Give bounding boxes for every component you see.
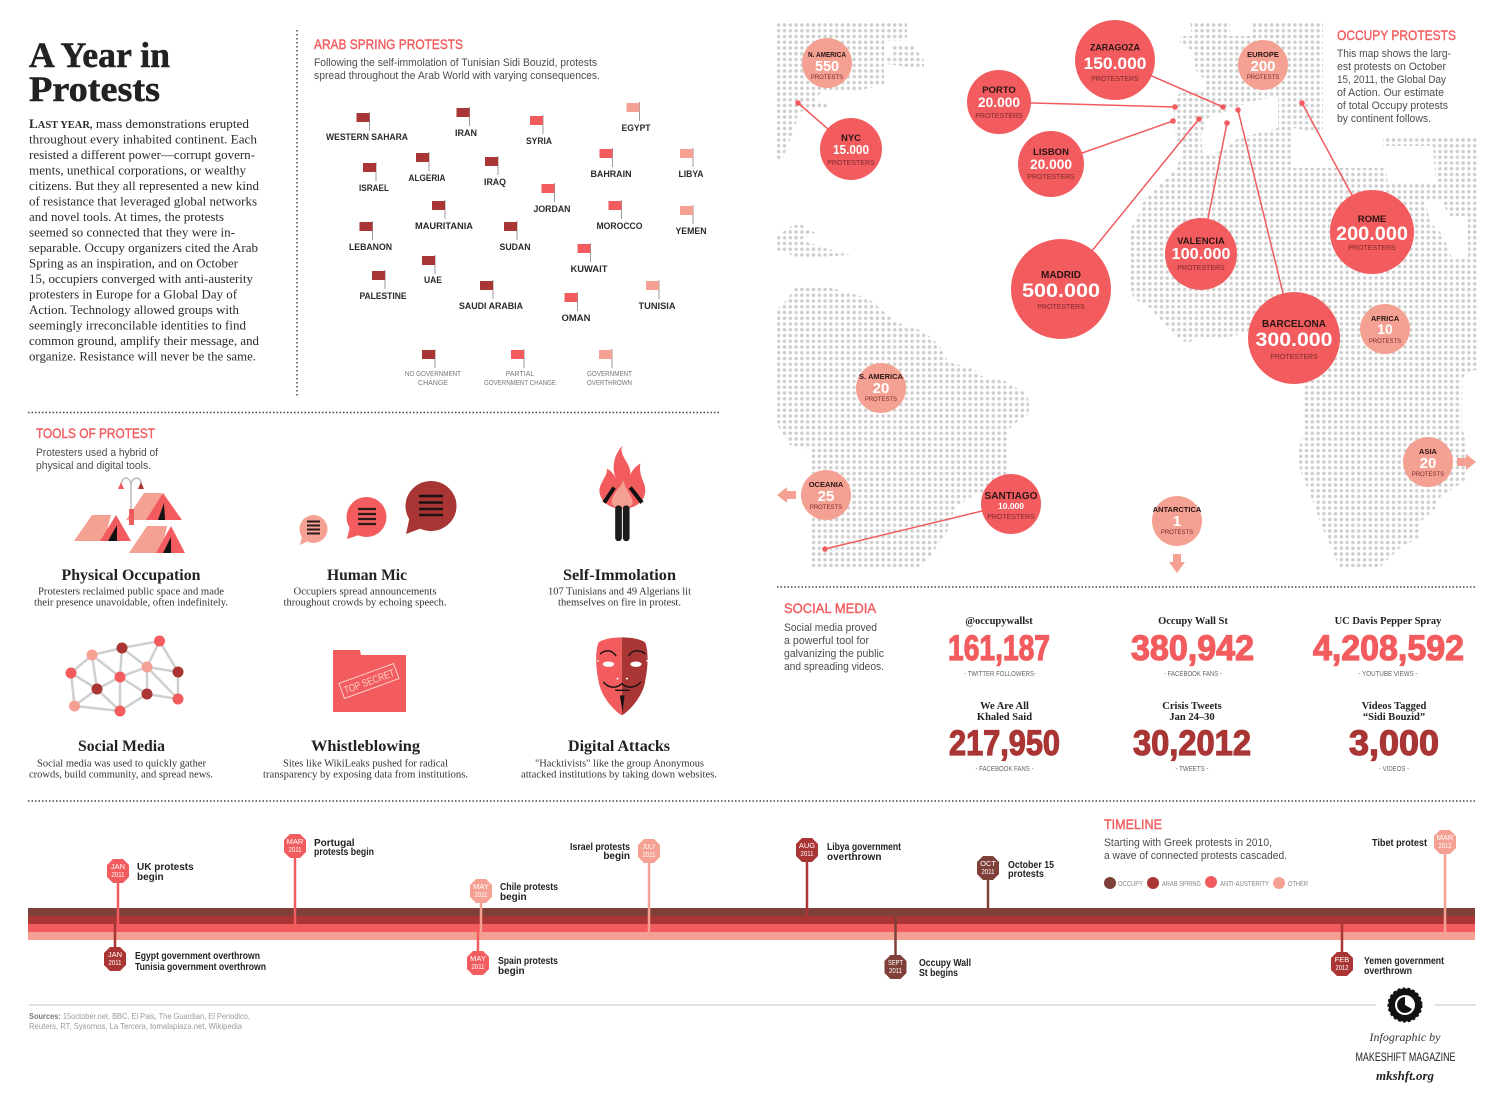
circle: valencia: VALENCIA [1177, 236, 1225, 247]
social media description: and spreading videos. [784, 661, 884, 673]
stat: crisis tweets: Jan 24–30 [1169, 712, 1215, 723]
event: october 15: 2011 [982, 867, 994, 876]
country labels: ISRAEL [359, 183, 389, 194]
stat: facebook fans: - FACEBOOK FANS - [1164, 669, 1222, 678]
intro text block: resisted a different power—corrupt govern- [29, 148, 255, 162]
arrow: asia [1457, 454, 1476, 470]
timeline legend: OCCUPY [1118, 881, 1143, 888]
circle: santiago [981, 474, 1041, 534]
country labels [326, 123, 707, 324]
intro text block: citizens. But they all represented a new kind [29, 179, 260, 193]
tool captions: Whistleblowing [311, 738, 420, 755]
circle: s. america: PROTESTS [865, 397, 897, 403]
event: egypt and tunisia: Egypt government overthrown [135, 951, 260, 962]
stat: crisis tweets: 30,2012 [1133, 724, 1251, 763]
circle: valencia [1165, 218, 1237, 290]
stat: youtube views: 4,208,592 [1313, 629, 1464, 668]
title: Protests [29, 69, 160, 109]
circle: rome: PROTESTERS [1348, 245, 1396, 252]
footer rule [29, 1004, 1476, 1006]
icon: tents and lamp [74, 478, 185, 553]
occupy description: This map shows the larg- [1337, 48, 1451, 60]
event: uk protests [107, 859, 194, 924]
event: portugal: MAR [287, 837, 304, 846]
tool captions: Digital Attacks [568, 738, 670, 755]
country labels: JORDAN [534, 204, 571, 215]
tool captions: Protesters reclaimed public space and made [38, 586, 224, 598]
circle: lisbon: PROTESTERS [1027, 174, 1075, 181]
stat: twitter followers: - TWITTER FOLLOWERS- [964, 669, 1036, 678]
circle: nyc: 15.000 [833, 143, 869, 157]
stat: facebook fans: 380,942 [1131, 629, 1254, 668]
circle: lisbon [1018, 131, 1084, 197]
event: uk protests: 2011 [112, 870, 124, 879]
event: tibet: MAR [1437, 833, 1454, 842]
event: portugal: 2011 [288, 845, 302, 854]
occupy description: est protests on October [1337, 61, 1446, 73]
tool captions [29, 567, 717, 780]
circle: nyc [820, 118, 882, 180]
dot world map [776, 23, 1477, 567]
country labels: PALESTINE [360, 291, 406, 302]
stat: facebook fans: Occupy Wall St [1158, 616, 1228, 627]
sources [29, 1011, 250, 1031]
circle: s. america [856, 363, 906, 413]
social media description: galvanizing the public [784, 648, 884, 660]
event: portugal: protests begin [314, 847, 374, 858]
icon: speech bubbles [300, 481, 456, 545]
circle: oceania: 25 [818, 488, 834, 505]
country labels: MAURITANIA [415, 221, 473, 232]
country labels: MOROCCO [596, 221, 642, 232]
panel: arab spring protests [314, 36, 707, 387]
icon: network [66, 636, 184, 716]
panel: tools of protest [29, 425, 717, 780]
arab spring description: spread throughout the Arab World with varying consequences. [314, 70, 600, 82]
circle: oceania [801, 470, 851, 520]
event: israel: JULY [642, 842, 656, 851]
event: chile: Chile protests [500, 882, 558, 893]
circle: africa: PROTESTS [1369, 339, 1401, 345]
event: tibet [1372, 830, 1456, 932]
social media description: a powerful tool for [784, 635, 869, 647]
stat: sidi bouzid videos: 3,000 [1349, 724, 1439, 763]
circle: porto: PORTO [982, 85, 1016, 96]
event: spain: begin [498, 966, 525, 977]
circle: zaragoza [1075, 20, 1155, 100]
credit: MAKESHIFT MAGAZINE [1356, 1050, 1456, 1064]
stat: khaled said: - FACEBOOK FANS - [976, 764, 1034, 773]
stat: twitter followers: 161,187 [948, 629, 1050, 668]
country labels: LIBYA [678, 169, 704, 180]
stat: sidi bouzid videos: “Sidi Bouzid” [1363, 712, 1425, 723]
circle: asia [1403, 437, 1453, 487]
event: uk protests: UK protests [137, 862, 194, 873]
circle: porto: PROTESTERS [975, 113, 1023, 120]
icon: top secret folder: TOP SECRET [342, 667, 397, 697]
event: egypt and tunisia: 2011 [108, 958, 122, 967]
country labels: SYRIA [526, 136, 552, 147]
icon: makeshift logo [1388, 988, 1422, 1022]
event: yemen: overthrown [1364, 966, 1412, 977]
intro text block: of resistance that leveraged global networks [29, 194, 257, 208]
circle: santiago: SANTIAGO [985, 491, 1038, 502]
circle: n. america: N. AMERICA [808, 50, 846, 59]
circle: europe: 200 [1250, 58, 1276, 75]
circle: antarctica: PROTESTS [1161, 530, 1193, 536]
event: israel: begin [603, 851, 630, 862]
timeline legend: OTHER [1288, 881, 1308, 888]
credit: Infographic by [1368, 1030, 1441, 1044]
icon: guy fawkes mask [596, 637, 648, 715]
circle: oceania: PROTESTS [810, 505, 842, 511]
tool captions: Social media was used to quickly gather [37, 758, 207, 770]
intro text block: seemed so connected that they were in- [29, 226, 235, 240]
event: chile [470, 879, 558, 932]
intro text block: protesters in Europe for a Global Day of [29, 288, 238, 302]
flag legend: GOVERNMENT CHANGE [484, 380, 556, 387]
intro text block: ments, unethical corporations, or wealthy [29, 164, 247, 178]
circle: asia: ASIA [1419, 447, 1438, 456]
event: yemen [1331, 924, 1445, 977]
stat: youtube views [1313, 616, 1464, 678]
flag legend [405, 349, 633, 387]
occupy description: by continent follows. [1337, 113, 1431, 125]
circle: rome: ROME [1358, 214, 1386, 225]
flag legend: GOVERNMENT [587, 371, 633, 378]
circle: porto [967, 70, 1031, 134]
tool captions: attacked institutions by taking down websites. [521, 770, 717, 780]
event: chile: 2011 [474, 890, 488, 899]
event: egypt and tunisia: JAN [108, 950, 122, 959]
occupy description: of total Occupy protests [1337, 100, 1448, 112]
circle: lisbon: 20.000 [1030, 157, 1072, 172]
event: libya: AUG [799, 841, 815, 850]
tool captions: transparency by exposing data from institutions. [263, 770, 468, 780]
country labels: UAE [424, 275, 442, 286]
sources: Sources: 15october.net, BBC, El Pais, The Guardian, El Periodico, [29, 1011, 250, 1021]
event: libya [796, 838, 902, 916]
event: yemen: 2012 [1336, 963, 1348, 972]
tools description: physical and digital tools. [36, 460, 151, 472]
country labels: IRAQ [484, 177, 506, 188]
circle: s. america: 20 [873, 380, 889, 397]
flag legend: CHANGE [418, 380, 448, 387]
tool captions: Self-Immolation [563, 567, 676, 584]
intro text block: common ground, amplify their message, and [29, 334, 260, 348]
circle: africa: 10 [1377, 321, 1393, 337]
tool captions: Social Media [78, 738, 165, 755]
title [29, 35, 170, 109]
circle: madrid: MADRID [1041, 270, 1081, 281]
tools description: Protesters used a hybrid of [36, 447, 159, 459]
country labels: YEMEN [676, 226, 707, 237]
sources: Reuters, RT, Sysomos, La Tercera, tomalaplaza.net, Wikipedia [29, 1021, 242, 1031]
event: israel [570, 839, 660, 932]
circle: rome: 200.000 [1336, 224, 1408, 245]
country labels: ALGERIA [408, 173, 446, 184]
intro text block: throughout every inhabited continent. Each [29, 132, 258, 146]
stat: twitter followers: @occupywallst [965, 616, 1033, 627]
event: uk protests: JAN [111, 862, 125, 871]
circle: africa [1360, 304, 1410, 354]
tool captions: throughout crowds by echoing speech. [284, 598, 446, 608]
tools description [36, 447, 159, 472]
circle: zaragoza: PROTESTERS [1091, 76, 1139, 83]
circle: antarctica [1152, 496, 1202, 546]
arrow: oceania [777, 487, 796, 503]
circle: valencia: PROTESTERS [1177, 265, 1225, 272]
country labels: TUNISIA [638, 301, 676, 312]
event: israel: Israel protests [570, 842, 630, 853]
tool captions: "Hacktivists" like the group Anonymous [535, 758, 704, 770]
stat: khaled said: We Are All [980, 701, 1029, 712]
arab spring description [314, 57, 600, 82]
panel: timeline [28, 816, 1475, 979]
circle: n. america: PROTESTS [811, 75, 843, 81]
tool captions: their presence unavoidable, often indefinitely. [34, 598, 228, 608]
timeline legend: ANTI-AUSTERITY [1220, 881, 1269, 888]
circle: oceania: OCEANIA [809, 480, 844, 489]
timeline bands [28, 908, 1475, 940]
tool captions: 107 Tunisians and 49 Algerians lit [548, 586, 691, 598]
event: october 15: October 15 [1008, 860, 1054, 871]
event: spain [467, 932, 558, 977]
heading: tools of protest: TOOLS OF PROTEST [36, 425, 155, 441]
tool captions: Sites like WikiLeaks pushed for radical [283, 758, 448, 770]
circle: antarctica: 1 [1173, 513, 1181, 530]
intro text block: 15, occupiers converged with anti-austerity [29, 272, 254, 286]
event: occupy wall st: SEPT [888, 958, 903, 967]
circle: rome [1330, 190, 1414, 274]
stat: youtube views: UC Davis Pepper Spray [1335, 616, 1442, 627]
connector lines [798, 60, 1372, 549]
circle: europe [1238, 40, 1288, 90]
event: occupy wall st [884, 916, 971, 979]
social media description [784, 622, 884, 673]
circle: porto: 20.000 [978, 95, 1020, 110]
heading: arab spring: ARAB SPRING PROTESTS [314, 36, 463, 52]
event: october 15: protests [1008, 869, 1044, 880]
event: libya: Libya government [827, 842, 902, 853]
tool captions: Occupiers spread announcements [294, 586, 437, 598]
flag legend: PARTIAL [506, 371, 534, 378]
event: libya: overthrown [827, 852, 881, 863]
stat: crisis tweets: Crisis Tweets [1162, 701, 1222, 712]
country labels: SUDAN [500, 242, 531, 253]
circle: barcelona [1248, 292, 1340, 384]
event: israel: 2011 [642, 850, 656, 859]
intro text block: organize. Resistance will never be the same. [29, 350, 256, 364]
circle: zaragoza: ZARAGOZA [1090, 42, 1140, 54]
credit: mkshft.org [1376, 1069, 1434, 1083]
heading: occupy protests: OCCUPY PROTESTS [1337, 27, 1456, 43]
circle: zaragoza: 150.000 [1084, 54, 1146, 73]
intro text block: seemingly irreconcilable identities to find [29, 318, 247, 332]
event: october 15: OCT [980, 859, 996, 868]
circle: s. america: S. AMERICA [859, 372, 904, 381]
intro text block: Action. Technology allowed groups with [29, 303, 240, 317]
intro text block: LAST YEAR, mass demonstrations erupted [29, 117, 250, 131]
circle: asia: 20 [1420, 455, 1436, 472]
circle: europe: EUROPE [1247, 50, 1279, 59]
circle: africa: AFRICA [1371, 314, 1400, 323]
event: uk protests: begin [137, 872, 164, 883]
event: occupy wall st: 2011 [889, 966, 902, 975]
circle: nyc: NYC [841, 133, 861, 144]
stat: youtube views: - YOUTUBE VIEWS - [1358, 669, 1418, 678]
tool captions: themselves on fire in protest. [558, 598, 681, 608]
stat: sidi bouzid videos [1349, 701, 1439, 773]
stat: khaled said: Khaled Said [977, 712, 1032, 723]
arab spring description: Following the self-immolation of Tunisian Sidi Bouzid, protests [314, 57, 597, 69]
event: egypt and tunisia: Tunisia government overthrown [135, 962, 266, 973]
timeline legend [1104, 876, 1308, 889]
icon: top secret folder [333, 650, 406, 712]
occupy description: of Action. Our estimate [1337, 87, 1444, 99]
country labels: IRAN [455, 128, 477, 139]
timeline legend: ARAB SPRING [1162, 881, 1201, 888]
event: october 15 [977, 856, 1054, 908]
panel: social media [784, 600, 1464, 773]
country labels: EGYPT [622, 123, 651, 134]
event: occupy wall st: Occupy Wall [919, 958, 971, 969]
event: yemen: Yemen government [1364, 956, 1445, 967]
arrow: antarctica [1169, 554, 1185, 573]
icon: burning figure [599, 446, 645, 538]
event: chile: MAY [473, 882, 489, 891]
timeline description [1104, 837, 1287, 862]
stat: twitter followers [948, 616, 1050, 678]
country labels: WESTERN SAHARA [326, 132, 408, 143]
location dots [795, 100, 1305, 552]
circle: santiago: 10.000 [998, 501, 1024, 511]
tool captions: crowds, build community, and spread news. [29, 770, 213, 780]
country labels: LEBANON [349, 242, 392, 253]
circle: barcelona: PROTESTERS [1270, 354, 1318, 361]
event: tibet: Tibet protest [1372, 838, 1428, 849]
occupy description: 15, 2011, the Global Day [1337, 74, 1446, 86]
country flags [356, 102, 693, 311]
event: occupy wall st: St begins [919, 968, 958, 979]
circle: antarctica: ANTARCTICA [1153, 505, 1202, 514]
circle: n. america: 550 [815, 58, 839, 75]
country labels: SAUDI ARABIA [459, 301, 523, 312]
event: portugal: Portugal [314, 838, 355, 849]
credit [1356, 1030, 1456, 1083]
circle: lisbon: LISBON [1033, 147, 1069, 158]
event: portugal [284, 834, 374, 924]
circle: madrid: PROTESTERS [1037, 304, 1085, 311]
circle: n. america [802, 38, 852, 88]
circle: madrid [1011, 239, 1111, 339]
timeline description: a wave of connected protests cascaded. [1104, 850, 1287, 862]
circle: nyc: PROTESTERS [827, 160, 875, 167]
event: tibet: 2012 [1438, 841, 1452, 850]
stat: sidi bouzid videos: Videos Tagged [1362, 701, 1426, 712]
tool captions: Physical Occupation [62, 567, 201, 584]
event: yemen: FEB [1335, 955, 1349, 964]
stat: crisis tweets: - TWEETS - [1176, 764, 1209, 773]
intro text block: Spring as an inspiration, and on October [29, 256, 239, 270]
stat: crisis tweets [1133, 701, 1251, 773]
country labels: BAHRAIN [590, 169, 632, 180]
circle: madrid: 500.000 [1022, 281, 1100, 302]
event: spain: 2011 [472, 962, 484, 971]
social media description: Social media proved [784, 622, 877, 634]
flag legend: NO GOVERNMENT [405, 371, 462, 378]
heading: social media: SOCIAL MEDIA [784, 600, 877, 616]
event: spain: Spain protests [498, 956, 558, 967]
country labels: OMAN [562, 313, 591, 324]
circle: barcelona: 300.000 [1256, 330, 1332, 351]
stat: khaled said: 217,950 [949, 724, 1060, 763]
event: libya: 2011 [800, 849, 814, 858]
circle: europe: PROTESTS [1247, 75, 1279, 81]
flag legend: OVERTHROWN [587, 380, 632, 387]
stat: khaled said [949, 701, 1060, 773]
intro text block: and novel tools. At times, the protests [29, 210, 224, 224]
event: spain: MAY [470, 954, 486, 963]
occupy description [1337, 48, 1451, 125]
panel: occupy protests map [776, 20, 1477, 573]
intro text block: separable. Occupy organizers cited the Arab [29, 241, 258, 255]
circle: asia: PROTESTS [1412, 472, 1444, 478]
circle: valencia: 100.000 [1172, 246, 1231, 263]
circle: barcelona: BARCELONA [1262, 319, 1326, 330]
timeline description: Starting with Greek protests in 2010, [1104, 837, 1272, 849]
event: chile: begin [500, 892, 527, 903]
country labels: KUWAIT [570, 264, 608, 275]
intro text block [29, 117, 260, 364]
event: egypt and tunisia [104, 924, 266, 973]
tool captions: Human Mic [327, 567, 407, 584]
title: A Year in [29, 35, 170, 75]
stat: facebook fans [1131, 616, 1254, 678]
circle: santiago: PROTESTERS [987, 514, 1035, 521]
heading: timeline: TIMELINE [1104, 816, 1162, 832]
stat: sidi bouzid videos: - VIDEOS - [1379, 764, 1409, 773]
